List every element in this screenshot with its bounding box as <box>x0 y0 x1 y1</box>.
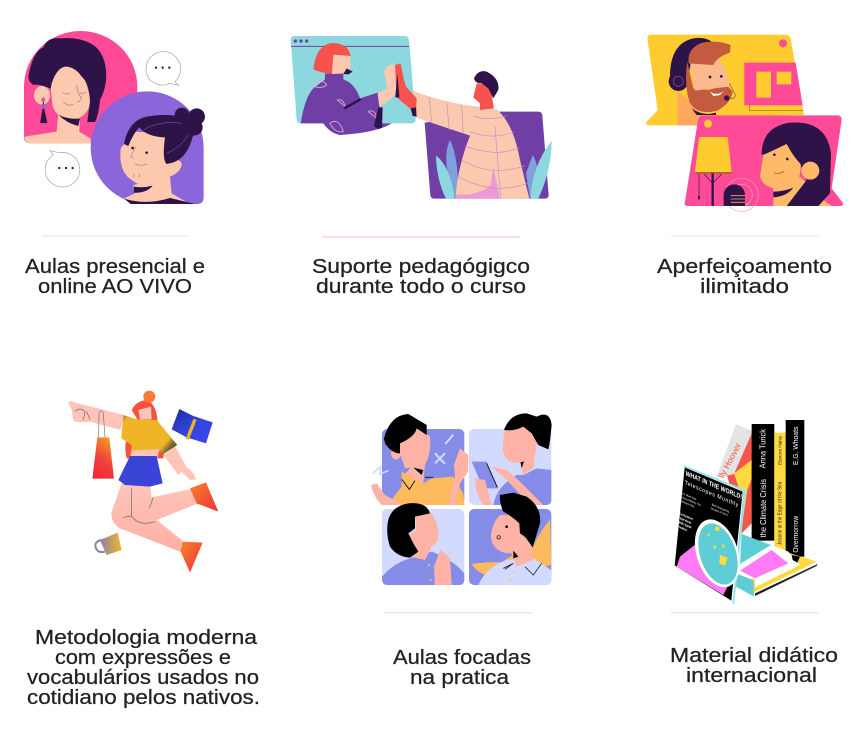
pink chat window <box>685 115 843 206</box>
magazine title: Nearest Star <box>681 499 695 509</box>
shoes <box>181 482 218 573</box>
panel: top left <box>371 414 468 505</box>
black spine book: the Climate Crisis <box>758 479 768 537</box>
caption: metodologia moderna <box>27 627 260 709</box>
caption: suporte pedagogico: Suporte pedagógigco <box>312 256 530 278</box>
pointing arm <box>68 401 124 430</box>
microphone <box>724 178 758 212</box>
belly and face <box>130 407 160 458</box>
panel: top right <box>469 413 552 505</box>
tilted gray and red book: lly Hoover <box>716 441 743 480</box>
speech bubble top <box>146 52 181 85</box>
caption: aperfeicoamento: ilimitado <box>700 276 789 298</box>
caption: aulas focadas <box>393 647 531 689</box>
caption: aulas presencial: Aulas presencial e <box>25 256 205 278</box>
yellow top <box>121 415 177 455</box>
black spine book <box>752 424 774 541</box>
caption: metodologia moderna: com expressões e <box>55 647 231 669</box>
tilted gray and red book <box>716 424 753 533</box>
pink arch background <box>24 31 137 143</box>
man in striped sweater <box>395 63 529 199</box>
yellow chat window <box>646 35 804 125</box>
magazine title: With Spot <box>677 520 692 530</box>
divider 3 <box>671 235 819 237</box>
black spine book: Anna Turick <box>758 429 767 468</box>
panel: bottom left <box>382 503 464 585</box>
yellow spine book: Elanore Haley <box>778 435 783 465</box>
woman with dark hair <box>760 122 832 206</box>
magazine title: An Start-Gas <box>682 491 697 501</box>
legs <box>111 483 198 552</box>
caption: suporte pedagogico: durante todo o curso <box>316 276 526 298</box>
panel: bottom right <box>469 493 551 585</box>
illustration: two friends chatting <box>24 31 205 204</box>
woman with hair bun <box>120 108 205 204</box>
hair back <box>125 400 164 458</box>
shopping bag <box>92 411 114 479</box>
speech bubble bottom <box>45 151 80 187</box>
magazine title: Telescopes Monthly <box>684 480 739 509</box>
second black spine book: Overmorrow <box>791 515 800 553</box>
divider 1 <box>42 235 189 237</box>
magazine title: Hunt Orbiting The <box>681 495 701 507</box>
magazine title <box>676 469 742 553</box>
caption: aulas presencial <box>25 256 205 298</box>
purple window <box>425 112 549 199</box>
magazine title: Interview <box>678 515 692 525</box>
divider 2 <box>322 236 520 238</box>
divider 5 <box>384 612 532 614</box>
yellow spine book: Jeanne at the Edge of the Sea <box>778 482 784 545</box>
magazine title: Exclusive <box>678 511 693 521</box>
bearded man with headset <box>669 38 735 125</box>
magazine title: Creator <box>676 524 688 533</box>
second black spine book <box>786 420 804 557</box>
caption: material didatico: Material didático <box>670 645 838 667</box>
illustration: video call between two people <box>646 35 843 212</box>
caption: metodologia moderna: vocabulários usados no <box>27 667 259 689</box>
caption: metodologia moderna: cotidiano pelos nativos. <box>27 687 260 709</box>
blue skirt <box>118 456 163 487</box>
teal browser window <box>291 36 416 123</box>
illustration: stack of international books <box>673 420 818 605</box>
floor lamp <box>695 137 732 206</box>
book <box>172 409 213 443</box>
caption: aulas focadas: na pratica <box>410 667 510 689</box>
pink dot <box>779 39 787 47</box>
caption: metodologia moderna: Metodologia moderna <box>35 627 258 649</box>
magazine title: Scopes of 2022 <box>711 506 728 517</box>
woman with red hair <box>301 43 399 135</box>
illustration: four people in video grid <box>371 413 552 585</box>
caption: aulas focadas: Aulas focadas <box>393 647 531 669</box>
yellow spine book <box>774 433 786 554</box>
caption: aperfeicoamento <box>657 256 832 298</box>
plants <box>436 140 552 199</box>
caption: material didatico <box>670 645 838 687</box>
right arm <box>163 446 196 480</box>
magazine <box>673 465 748 605</box>
caption: aperfeicoamento: Aperfeiçoamento <box>657 256 832 278</box>
wall board with notes <box>744 63 803 110</box>
caption: aulas presencial: online AO VIVO <box>38 276 192 298</box>
yellow dot <box>704 120 712 128</box>
body linework <box>123 488 155 523</box>
telescope artwork <box>677 543 728 595</box>
purple rounded background <box>91 91 204 204</box>
caption: suporte pedagogico <box>312 256 530 298</box>
caption: material didatico: internacional <box>686 665 817 687</box>
magazine title: WHAT IN THE WORLD! <box>685 470 742 501</box>
second black spine book: E.G. Whoats <box>791 426 800 465</box>
illustration: high five over video call <box>291 36 552 199</box>
magazine title: Best Stargazing <box>712 502 730 514</box>
woman with earring <box>25 38 106 144</box>
divider 6 <box>671 612 819 614</box>
flat books <box>736 534 818 597</box>
illustration: jumping woman with shopping bag <box>68 391 218 573</box>
mug <box>95 533 122 555</box>
